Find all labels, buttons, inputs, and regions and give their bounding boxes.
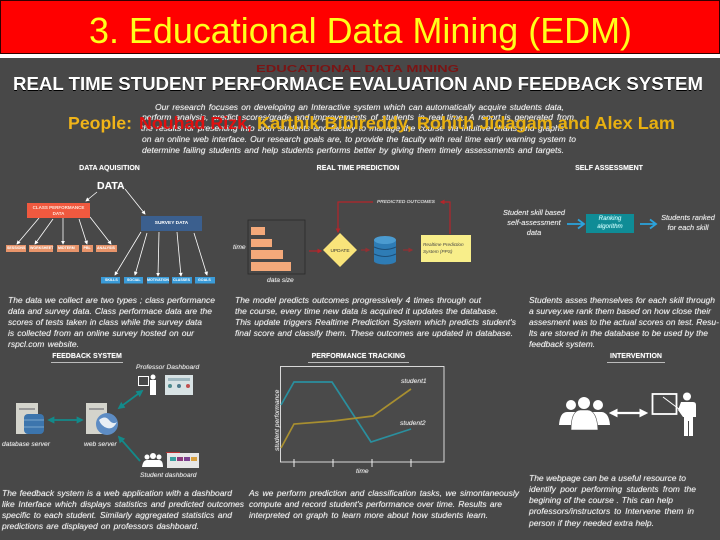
text: data acquisition description: data and survey data. Class performace data are the bbox=[8, 306, 212, 316]
intro paragraph: perform analysis, predict scores/grade and improvements of students in real time. A report is generated from bbox=[142, 112, 574, 122]
text: prediction description: This update triggers Realtime Prediction System which predicts student's bbox=[235, 316, 516, 326]
diagram: students and instructor bbox=[559, 392, 696, 436]
labels: class performance sub-boxes: MIDTERM bbox=[58, 246, 75, 250]
label: skill data: Student skill based bbox=[503, 208, 565, 217]
text: prediction description bbox=[235, 294, 516, 338]
text: data acquisition description: The data we collect are two types ; class performance bbox=[8, 294, 215, 304]
label: skill data: data bbox=[527, 228, 541, 237]
heading: intervention: INTERVENTION bbox=[610, 352, 662, 360]
text: intervention description: person if they needed extra help. bbox=[529, 518, 654, 528]
text: tracking description: compute and record student's performance over time. Results are bbox=[249, 498, 502, 508]
label: students ranked: Students ranked bbox=[661, 213, 715, 222]
labels: class performance sub-boxes bbox=[7, 246, 115, 250]
heading: performance tracking bbox=[308, 350, 409, 362]
text: self assessment description: Students asses themselves for each skill through bbox=[529, 294, 715, 304]
label: class performance data bbox=[32, 204, 84, 216]
panel: intervention bbox=[528, 352, 696, 528]
text: data acquisition description: scores of tests taken in class while the survey data bbox=[8, 316, 202, 326]
heading: self assessment: SELF ASSESSMENT bbox=[575, 164, 643, 172]
label: student 1: student1 bbox=[401, 378, 427, 385]
diagram: prediction flow: System (PPS) bbox=[423, 249, 453, 254]
diagram: prediction flow: UPDATE bbox=[330, 248, 350, 254]
text: self assessment description: a survey.we rank them based on how close their bbox=[529, 306, 711, 316]
label: ranking algorithm bbox=[597, 215, 623, 230]
label: skill data bbox=[503, 208, 566, 237]
intro paragraph: on an online web interface. Our research goals are, to provide the faculty with real time early warning system to bbox=[142, 134, 576, 144]
text: tracking description bbox=[248, 488, 520, 520]
text: intervention description: The webpage can be a useful resource to bbox=[529, 472, 686, 482]
label: ranking algorithm: algorithm bbox=[597, 223, 623, 230]
text: feedback description: like Interface which displays statistics and predicted outcomes bbox=[2, 498, 244, 508]
panel: self assessment bbox=[503, 164, 719, 349]
text: feedback description: predictions are displayed on professors dashboard. bbox=[2, 520, 199, 530]
label: predicted outcomes: PREDICTED OUTCOMES bbox=[377, 200, 435, 204]
heading: performance tracking: PERFORMANCE TRACKING bbox=[312, 352, 405, 360]
diagram: ranking flow bbox=[567, 214, 658, 233]
label: students ranked: for each skill bbox=[667, 222, 709, 232]
heading: data acquisition: DATA AQUISITION bbox=[79, 164, 140, 172]
text: intervention description bbox=[528, 472, 696, 528]
text: self assessment description bbox=[528, 294, 719, 349]
label: professor dashboard: Professor Dashboard bbox=[136, 364, 199, 370]
text: tracking description: interpreted on graph to learn more about how students learn. bbox=[249, 510, 488, 520]
panel: real time prediction bbox=[233, 164, 516, 338]
axis label: time: time bbox=[233, 244, 246, 250]
heading: intervention bbox=[607, 350, 665, 362]
labels: survey sub-boxes: MOTIVATION bbox=[147, 278, 169, 282]
text: intervention description: identify poor performing students from the bbox=[529, 484, 696, 494]
label: student dashboard: Student dashboard bbox=[140, 472, 197, 478]
text: intervention description: begining of the course . This can help bbox=[529, 495, 673, 505]
labels: class performance sub-boxes: PBL bbox=[84, 246, 91, 250]
text: intervention description: professors/instructors to Intervene them in bbox=[529, 506, 694, 516]
people credits line: People: bbox=[68, 113, 132, 133]
panel: feedback system bbox=[2, 352, 244, 531]
diagram: prediction flow: Realtime Prediction bbox=[423, 242, 464, 247]
line chart: student performance over time bbox=[280, 366, 444, 467]
heading: real time prediction: REAL TIME PREDICTION bbox=[317, 164, 399, 172]
labels: class performance sub-boxes: SESSIONS bbox=[7, 246, 25, 250]
diagram: data tree bbox=[6, 188, 215, 284]
labels: survey sub-boxes: SOCIAL bbox=[127, 278, 141, 282]
label: class performance data: CLASS PERFORMANCE bbox=[33, 204, 84, 210]
text: data acquisition description bbox=[8, 294, 215, 349]
text: feedback description: The feedback system is a web application with a dashboard bbox=[2, 488, 232, 498]
people credits line: Nouhad Rizk, bbox=[139, 113, 252, 133]
labels: survey sub-boxes: SKILLS bbox=[105, 278, 118, 282]
text: self assessment description: lts are stored in the database to be used by the bbox=[529, 328, 708, 338]
text: feedback description bbox=[2, 488, 244, 531]
people credits line bbox=[68, 113, 675, 133]
intro paragraph: determine failing students and help students performs better by giving them timely assessments and targets. bbox=[142, 144, 564, 154]
text: data acquisition description: rspcl.com website. bbox=[8, 338, 79, 348]
panel: data acquisition bbox=[6, 164, 215, 349]
label: student 2: student2 bbox=[400, 420, 426, 427]
labels: class performance sub-boxes: WORKSHEET bbox=[30, 246, 53, 250]
title: 3. Educational Data Mining (EDM) bbox=[89, 10, 632, 51]
text: self assessment description: assesment was to the actual scores on test. Resu- bbox=[529, 316, 719, 326]
heading: feedback system bbox=[51, 350, 123, 362]
label: web server: web server bbox=[84, 440, 117, 448]
label: skill data: self-assessment bbox=[507, 218, 561, 227]
title bar bbox=[0, 0, 720, 54]
text: self assessment description: feedback system. bbox=[529, 338, 595, 348]
diagram: prediction flow bbox=[248, 200, 471, 274]
text: feedback description: specific to each student. Similarly aggregated statistics and bbox=[2, 510, 232, 520]
people credits line: Karthik Bibireddy, Rohith Jidagam and Alex Lam bbox=[257, 113, 675, 133]
heading: feedback system: FEEDBACK SYSTEM bbox=[52, 352, 122, 360]
labels: survey sub-boxes: CLASSES bbox=[173, 278, 190, 282]
label: database server: database server bbox=[2, 440, 50, 448]
label: data root: DATA bbox=[97, 180, 125, 192]
panel: performance tracking bbox=[248, 352, 520, 520]
diagram: servers and dashboards bbox=[16, 374, 199, 468]
axis label: data size: data size bbox=[267, 276, 294, 284]
label: students ranked bbox=[661, 213, 716, 232]
poster kicker: EDUCATIONAL DATA MINING bbox=[256, 63, 459, 75]
labels: class performance sub-boxes: ANALYSIS bbox=[97, 246, 115, 250]
label: ranking algorithm: Ranking bbox=[599, 215, 621, 222]
text: data acquisition description: is collected from an online survey hosted on our bbox=[8, 328, 194, 338]
text: tracking description: As we perform prediction and classification tasks, we simontaneously bbox=[249, 488, 519, 498]
labels: survey sub-boxes: GOALS bbox=[198, 278, 211, 282]
text: prediction description: The model predicts outcomes progressively 4 times through out bbox=[235, 294, 481, 304]
label: survey data: SURVEY DATA bbox=[155, 221, 188, 226]
intro paragraph bbox=[141, 102, 576, 155]
labels: survey sub-boxes bbox=[105, 278, 211, 282]
poster heading: REAL TIME STUDENT PERFORMACE EVALUATION AND FEEDBACK SYSTEM bbox=[13, 74, 703, 94]
text: prediction description: the course, every time new data is acquired it updates the database. bbox=[235, 306, 498, 316]
intro paragraph: the results for presenting info both students and faculty to manage the course via intuitive charts and graphs bbox=[141, 123, 564, 133]
intro paragraph: Our research focuses on developing an Interactive system which can automatically acquire students data, bbox=[155, 102, 564, 112]
text: prediction description: final score and classify them. These outcomes are updated in database. bbox=[235, 328, 513, 338]
label: class performance data: DATA bbox=[53, 210, 64, 216]
axis label: student performance: student performance bbox=[274, 390, 280, 451]
axis label: time: time bbox=[356, 468, 369, 475]
